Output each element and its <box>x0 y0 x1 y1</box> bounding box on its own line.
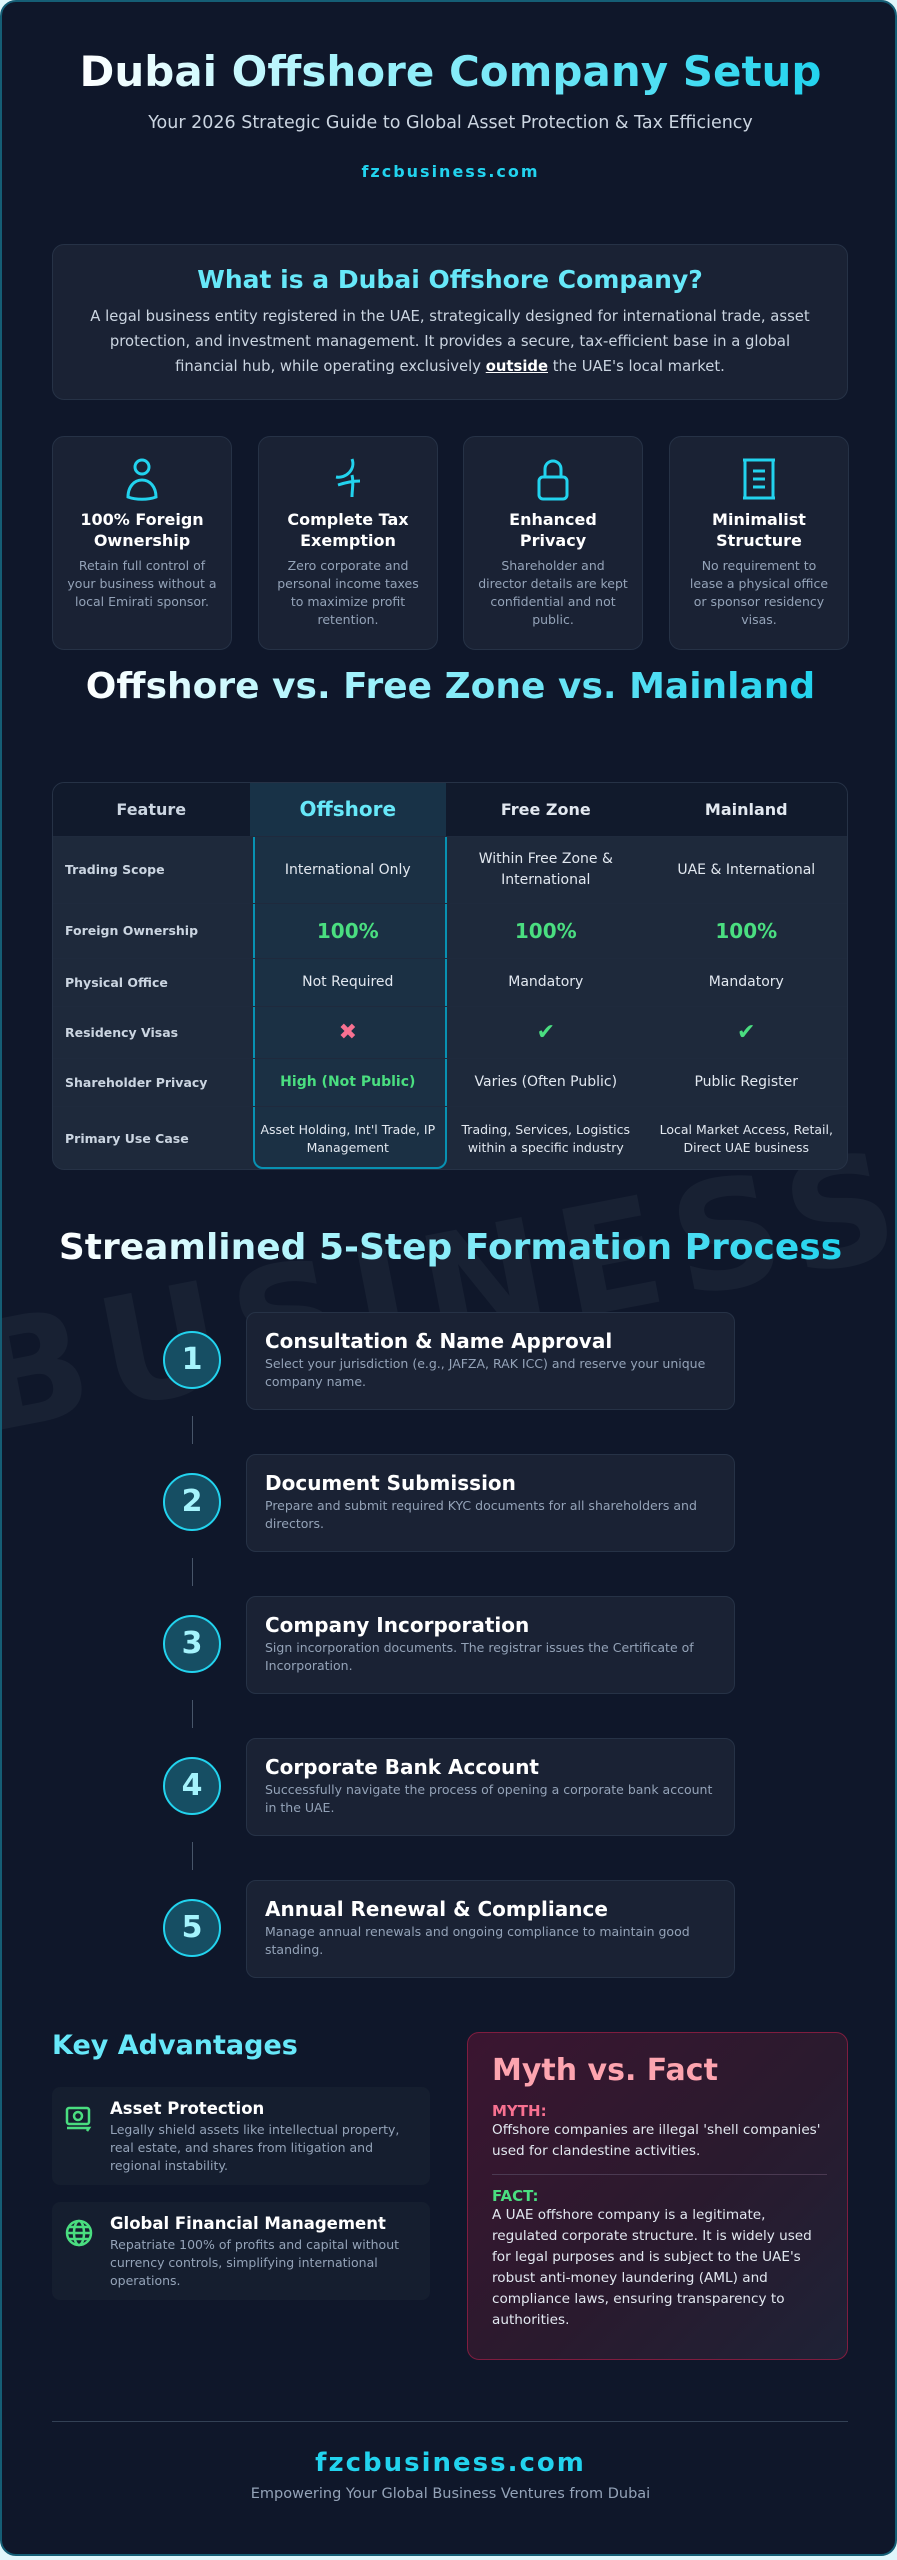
panel: feature 4: No requirement to lease a physical office or sponsor residency visas. <box>690 558 828 627</box>
icon: money <box>66 2106 92 2132</box>
comparison table: ✖ <box>339 1020 357 1044</box>
panel: feature 3: Shareholder and director details are kept confidential and not public. <box>478 558 628 627</box>
panel: feature 3 <box>463 436 643 650</box>
comparison table: Primary Use Case <box>65 1131 189 1146</box>
panel: feature 2: Complete Tax <box>287 510 409 529</box>
heading: Myth vs. Fact <box>492 2053 718 2088</box>
panel: feature 1: Retain full control of your business without a local Emirati sponsor. <box>67 558 217 609</box>
comparison table: Management <box>307 1140 389 1155</box>
panel: feature 2: Exemption <box>300 531 396 550</box>
step 3: 3 <box>182 1626 202 1661</box>
step 2: 2 <box>182 1484 202 1519</box>
panel: feature 3: Privacy <box>520 531 586 550</box>
comparison table: Mainland <box>705 800 788 819</box>
step 2 <box>163 1454 735 1552</box>
step 4: Corporate Bank Account <box>265 1755 539 1779</box>
comparison table: Residency Visas <box>65 1024 178 1040</box>
icon: tax <box>336 458 360 497</box>
panel: feature 4: Structure <box>716 531 802 550</box>
comparison table: UAE & International <box>677 862 815 878</box>
comparison table: International <box>501 872 590 888</box>
advantage: asset protection: Legally shield assets like intellectual property, real estate, and shares from litigation and regional instability. <box>110 2122 399 2173</box>
advantage: global finance: Global Financial Management <box>110 2214 386 2233</box>
panel: feature 4 <box>669 436 849 650</box>
panel: feature 3: Enhanced <box>509 510 597 529</box>
comparison table: Public Register <box>694 1074 798 1090</box>
myth: MYTH: <box>492 2102 547 2120</box>
icon: document <box>743 458 775 500</box>
site link: fzcbusiness.com <box>361 162 540 181</box>
comparison table: Varies (Often Public) <box>474 1074 617 1090</box>
comparison table: International Only <box>285 862 411 878</box>
comparison table: Physical Office <box>65 974 168 990</box>
panel: myth vs fact <box>467 2032 848 2360</box>
comparison table: Local Market Access, Retail, <box>660 1122 833 1137</box>
step 3 <box>163 1596 735 1694</box>
advantage: global finance <box>52 2202 430 2300</box>
comparison table: High (Not Public) <box>280 1074 415 1090</box>
comparison table: Offshore <box>300 797 396 821</box>
heading: key advantages: Key Advantages <box>52 2030 298 2061</box>
panel: feature 2 <box>258 436 438 650</box>
step 2: Document Submission <box>265 1471 516 1495</box>
panel: feature 1: Ownership <box>94 531 190 550</box>
comparison table <box>52 782 848 1170</box>
advantage: global finance: Repatriate 100% of profits and capital without currency controls, simplifying international operations. <box>110 2237 399 2288</box>
step 4 <box>163 1738 735 1836</box>
comparison table: Foreign Ownership <box>65 923 198 938</box>
step 2: Prepare and submit required KYC documents for all shareholders and directors. <box>265 1498 697 1531</box>
comparison table: Direct UAE business <box>684 1140 809 1155</box>
comparison table: Mandatory <box>508 974 583 990</box>
comparison table: Mandatory <box>709 974 784 990</box>
fact: FACT: <box>492 2187 539 2205</box>
step 1: Consultation & Name Approval <box>265 1329 612 1353</box>
comparison table: 100% <box>317 918 379 942</box>
comparison table: ✔ <box>737 1020 755 1044</box>
step 5: Manage annual renewals and ongoing compliance to maintain good standing. <box>265 1924 690 1957</box>
step 5 <box>163 1880 735 1978</box>
icon: lock <box>538 460 568 500</box>
step 1: Select your jurisdiction (e.g., JAFZA, RAK ICC) and reserve your unique company name. <box>265 1356 705 1389</box>
footer <box>251 2448 650 2502</box>
step 5: 5 <box>182 1910 202 1945</box>
comparison table: Free Zone <box>501 800 591 819</box>
panel: myth vs fact: Offshore companies are illegal 'shell companies' used for clandestine activities. <box>492 2122 820 2159</box>
icon: person <box>126 458 158 501</box>
offshore column highlight <box>253 783 447 1169</box>
step 1 <box>163 1312 735 1410</box>
subtitle: Your 2026 Strategic Guide to Global Asset Protection & Tax Efficiency <box>148 113 753 133</box>
comparison table: Feature <box>116 800 186 819</box>
panel: feature 2: Zero corporate and personal income taxes to maximize profit retention. <box>277 558 419 627</box>
heading: comparison: Offshore vs. Free Zone vs. Mainland <box>86 666 815 707</box>
step 1: 1 <box>182 1342 202 1377</box>
comparison table: ✔ <box>537 1020 555 1044</box>
step 4: Successfully navigate the process of opening a corporate bank account in the UAE. <box>265 1782 712 1815</box>
step 4: 4 <box>182 1768 202 1803</box>
footer: fzcbusiness.com <box>315 2448 586 2478</box>
panel: feature 4: Minimalist <box>712 510 806 529</box>
comparison table: Not Required <box>302 974 393 990</box>
advantage: asset protection <box>52 2087 430 2185</box>
heading: process: Streamlined 5-Step Formation Process <box>59 1227 842 1268</box>
step 3: Sign incorporation documents. The registrar issues the Certificate of Incorporation. <box>265 1640 694 1673</box>
icon: globe <box>66 2220 92 2246</box>
title: Dubai Offshore Company Setup <box>79 47 822 96</box>
text block: A legal business entity registered in the UAE, strategically designed for international trade, asset protection, and investment management. It provides a secure, tax-efficient base in a global financial hub, while operating exclusively outside the UAE's local market. <box>90 308 810 375</box>
comparison table: within a specific industry <box>468 1140 624 1155</box>
comparison table: Asset Holding, Int'l Trade, IP <box>260 1122 435 1137</box>
comparison table: 100% <box>715 918 777 942</box>
comparison table: Shareholder Privacy <box>65 1074 207 1090</box>
comparison table: 100% <box>515 918 577 942</box>
comparison table: Within Free Zone & <box>479 850 613 866</box>
panel: feature 1 <box>52 436 232 650</box>
comparison table: Trading, Services, Logistics <box>462 1122 630 1137</box>
step 5: Annual Renewal & Compliance <box>265 1897 608 1921</box>
step 3: Company Incorporation <box>265 1613 529 1637</box>
panel: myth vs fact: A UAE offshore company is a legitimate, regulated corporate structure. It is widely used for legal purposes and is subject to the UAE's robust anti-money laundering (AML) and compliance laws, ensuring transparency to authorities. <box>492 2207 812 2328</box>
heading: What is a Dubai Offshore Company? <box>197 265 703 294</box>
comparison table: Trading Scope <box>65 862 165 877</box>
panel: what is <box>52 244 848 400</box>
panel: feature 1: 100% Foreign <box>80 510 204 529</box>
footer: Empowering Your Global Business Ventures from Dubai <box>251 2486 650 2502</box>
advantage: asset protection: Asset Protection <box>110 2099 264 2118</box>
